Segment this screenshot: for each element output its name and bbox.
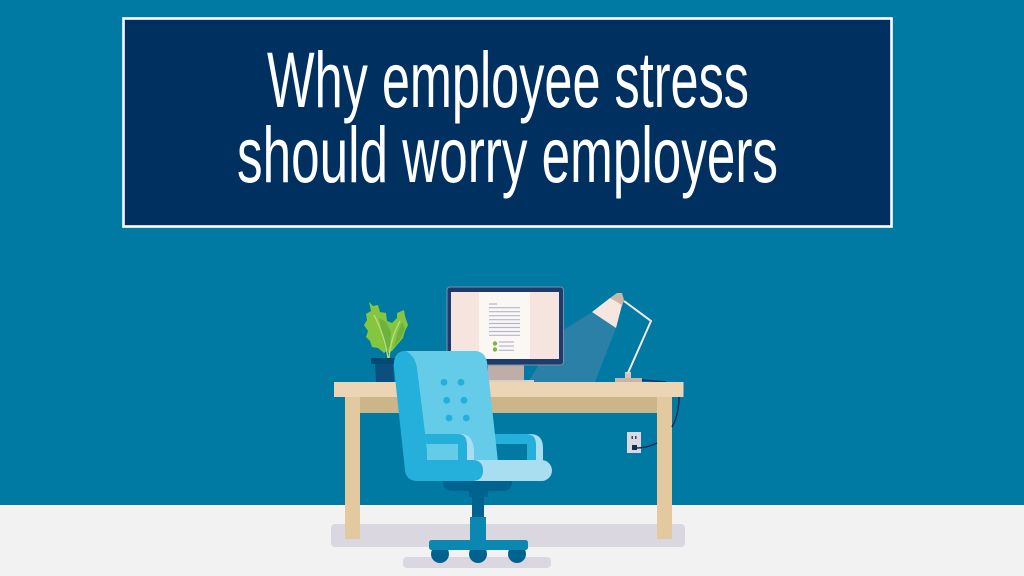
wall outlet	[627, 432, 641, 453]
potted plant	[364, 302, 408, 382]
floor shadow under desk	[331, 524, 685, 547]
back dimples	[441, 379, 470, 421]
leaf shading	[379, 318, 405, 352]
far armrest	[490, 434, 543, 462]
chair base	[429, 481, 528, 563]
green check dots	[493, 341, 497, 352]
monitor stand	[488, 365, 534, 382]
document text lines	[489, 304, 520, 350]
seat cushion	[406, 460, 552, 481]
dark side band	[394, 351, 440, 481]
leaf stems	[374, 315, 400, 358]
desk	[334, 382, 684, 539]
title text	[237, 35, 778, 199]
lamp light beam	[528, 312, 616, 382]
floor shadow under chair	[403, 557, 551, 568]
near armrest	[425, 434, 474, 460]
title text: Why employee stress	[267, 35, 749, 124]
computer monitor	[447, 287, 564, 382]
title panel	[124, 18, 892, 226]
left leaf	[364, 302, 393, 353]
desk lamp	[592, 293, 666, 382]
right leaf	[388, 310, 408, 353]
chair back	[394, 351, 498, 481]
office chair	[394, 351, 552, 563]
power cable	[637, 397, 679, 448]
